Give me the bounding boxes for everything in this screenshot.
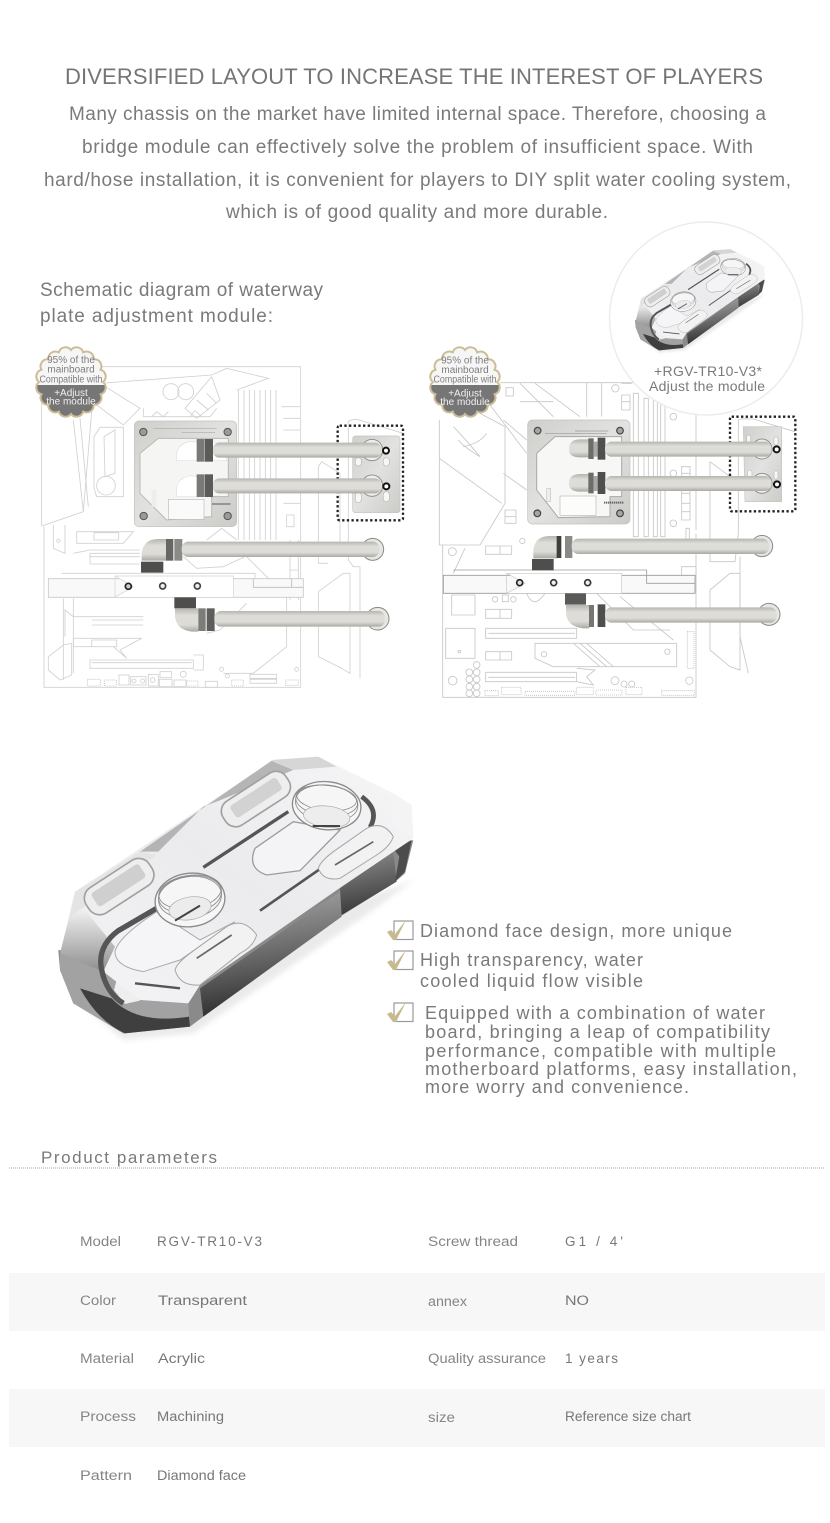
lower tubes and elbows (141, 538, 389, 632)
right badge: mainboard (441, 365, 489, 376)
bridge bar (443, 570, 695, 593)
row: model and screw thread (80, 1234, 623, 1249)
schematic heading: Schematic diagram of waterway (40, 280, 324, 301)
schematic heading: plate adjustment module: (40, 306, 273, 327)
left badge: Compatible with (40, 374, 102, 386)
feature list (387, 920, 797, 1097)
motherboard outline art (439, 383, 795, 697)
intro paragraph: Many chassis on the market have limited internal space. Therefore, choosing a (69, 104, 766, 125)
row: model and screw thread: Model (80, 1234, 121, 1249)
feature text 3: motherboard platforms, easy installation, (425, 1059, 797, 1079)
row: material and quality assurance: Acrylic (158, 1351, 205, 1366)
left badge: +Adjust (54, 388, 88, 399)
callout circle: adjust module (610, 222, 802, 415)
module plate (743, 427, 782, 502)
feature text 3: performance, compatible with multiple (425, 1041, 776, 1061)
right badge (429, 346, 501, 418)
threaded ports (152, 778, 363, 931)
callout caption: +RGV-TR10-V3* (654, 363, 763, 379)
icon: check 2 (387, 950, 413, 970)
CPU water block (134, 421, 237, 527)
large module photo (58, 757, 413, 1040)
row: model and screw thread: RGV-TR10-V3 (157, 1234, 262, 1249)
callout caption: Adjust the module (649, 378, 765, 394)
schematic heading (40, 280, 324, 327)
intro paragraph (44, 104, 791, 223)
row: pattern: Pattern (80, 1468, 132, 1483)
bridge bar (48, 576, 303, 597)
icon: small module photo (635, 249, 765, 353)
left badge: 95% of the (47, 355, 95, 366)
feature text 3: board, bringing a leap of compatibility (425, 1022, 770, 1042)
tubes upper (569, 438, 780, 494)
row: material and quality assurance (80, 1351, 618, 1366)
feature text 3: Equipped with a combination of water (425, 1003, 765, 1023)
row: process and size: Reference size chart (565, 1409, 691, 1424)
feature text 2 (420, 950, 643, 991)
icon: check 3 (387, 1002, 413, 1022)
right motherboard diagram (439, 383, 795, 697)
tubes upper (197, 439, 389, 497)
row: pattern: Diamond face (157, 1468, 246, 1483)
motherboard outline art (42, 367, 403, 687)
row: color and annex: annex (428, 1294, 467, 1309)
callout caption (649, 363, 765, 394)
feature text 3: more worry and convenience. (425, 1077, 689, 1097)
left motherboard diagram (42, 367, 403, 687)
lower tubes and elbows (532, 535, 780, 628)
row: process and size: size (428, 1410, 455, 1425)
row: model and screw thread: Screw thread (428, 1234, 518, 1249)
inner channel window (115, 912, 235, 972)
feature text 2: High transparency, water (420, 950, 643, 970)
slot recesses (80, 767, 295, 920)
title: DIVERSIFIED LAYOUT TO INCREASE THE INTEREST OF PLAYERS (65, 64, 763, 89)
intro paragraph: bridge module can effectively solve the problem of insufficient space. With (82, 137, 753, 158)
left badge (35, 346, 107, 418)
row: material and quality assurance: Material (80, 1351, 134, 1366)
row: pattern (80, 1468, 246, 1483)
bevels (60, 908, 115, 972)
feature text 1: Diamond face design, more unique (420, 921, 732, 941)
side grips (175, 826, 393, 985)
row: color and annex: NO (565, 1293, 589, 1308)
module top face (68, 757, 413, 1003)
parameters table (9, 1234, 825, 1483)
right badge: the module (440, 397, 490, 408)
product parameters heading: Product parameters (41, 1148, 217, 1167)
row: material and quality assurance: 1 years (565, 1351, 618, 1366)
left badge: mainboard (47, 364, 95, 376)
feature text 2: cooled liquid flow visible (420, 971, 643, 991)
right badge: Compatible with (434, 374, 496, 386)
CPU water block (528, 420, 630, 524)
row: model and screw thread: G1 / 4' (565, 1234, 623, 1249)
intro paragraph: hard/hose installation, it is convenient for players to DIY split water cooling system, (44, 170, 791, 191)
row: color and annex: Transparent (158, 1293, 247, 1308)
intro paragraph: which is of good quality and more durable. (225, 202, 608, 223)
water channel grooves (101, 797, 374, 1003)
row: material and quality assurance: Quality assurance (428, 1351, 546, 1366)
module body sides (58, 840, 413, 1033)
right badge: 95% of the (441, 356, 489, 366)
dotted outline around module (730, 417, 795, 511)
feature text 3 (425, 1003, 797, 1097)
module plate (353, 436, 400, 513)
icon: check 1 (387, 920, 413, 940)
row: process and size (80, 1409, 691, 1425)
row: process and size: Process (80, 1409, 136, 1424)
row: process and size: Machining (157, 1409, 224, 1424)
row: color and annex: Color (80, 1293, 117, 1308)
left badge: the module (46, 396, 96, 408)
dotted outline around module (338, 426, 403, 520)
row: color and annex (80, 1293, 589, 1309)
right badge: +Adjust (448, 388, 482, 400)
